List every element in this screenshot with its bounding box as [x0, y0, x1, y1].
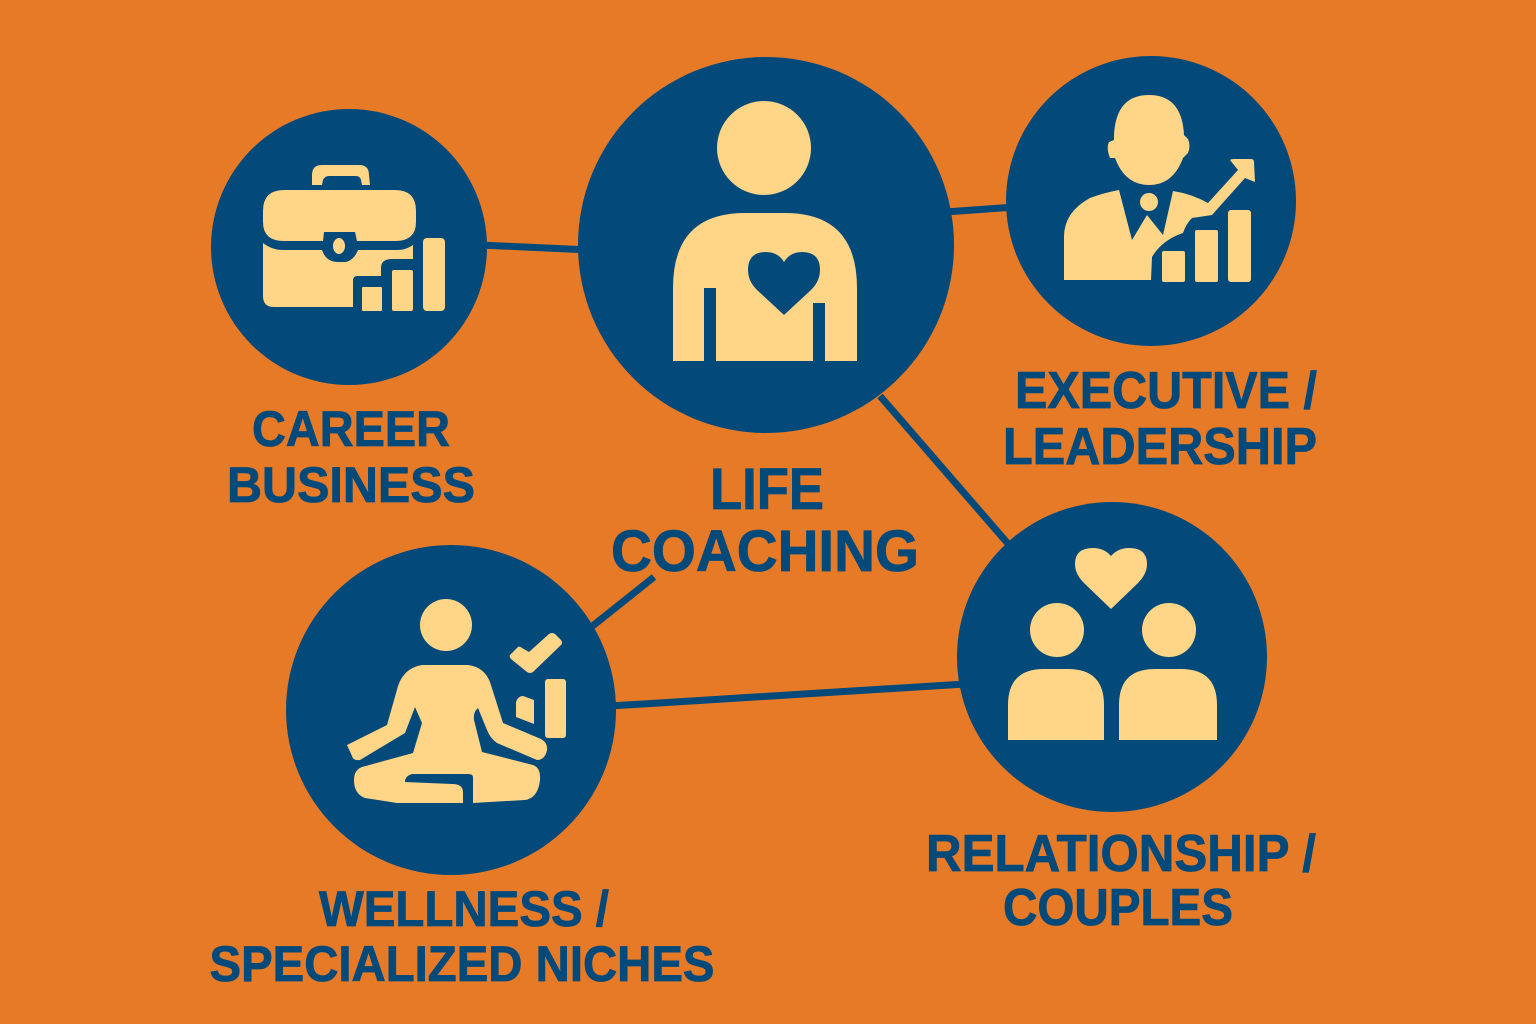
label: executive leadership: LEADERSHIP [1003, 418, 1317, 476]
connector: life coaching to relationship [880, 396, 1010, 546]
label: executive leadership: EXECUTIVE / [1015, 362, 1317, 420]
label: relationship couples: COUPLES [1003, 879, 1233, 937]
icon: couple with heart [1008, 548, 1217, 740]
label: wellness specialized niches: WELLNESS / [319, 881, 609, 937]
label: life coaching: LIFE [710, 457, 824, 522]
node: career business [211, 109, 487, 385]
connector: career to life coaching [480, 245, 590, 250]
icon: person with heart [673, 101, 857, 361]
icon: executive with growth chart [1064, 95, 1255, 282]
label: career business: CAREER [252, 401, 450, 457]
node: executive leadership [1006, 56, 1296, 346]
connector: wellness to relationship [610, 684, 965, 706]
label: wellness specialized niches: SPECIALIZED NICHES [210, 936, 714, 992]
label: career business: BUSINESS [227, 457, 475, 513]
node: relationship couples [957, 502, 1267, 812]
node: life coaching [578, 57, 954, 433]
icon: meditating figure with check [347, 599, 566, 803]
label: life coaching [611, 457, 919, 584]
connector: wellness to life coaching label [590, 577, 654, 628]
label: relationship couples: RELATIONSHIP / [926, 825, 1316, 883]
label: relationship couples [926, 825, 1316, 937]
label: life coaching: COACHING [611, 519, 919, 584]
label: career business [227, 401, 475, 513]
icon: briefcase with bars [263, 165, 445, 311]
label: wellness specialized niches [210, 881, 714, 992]
connector: life coaching to executive [945, 207, 1015, 212]
label: executive leadership [1003, 362, 1317, 476]
node: wellness [286, 545, 616, 875]
